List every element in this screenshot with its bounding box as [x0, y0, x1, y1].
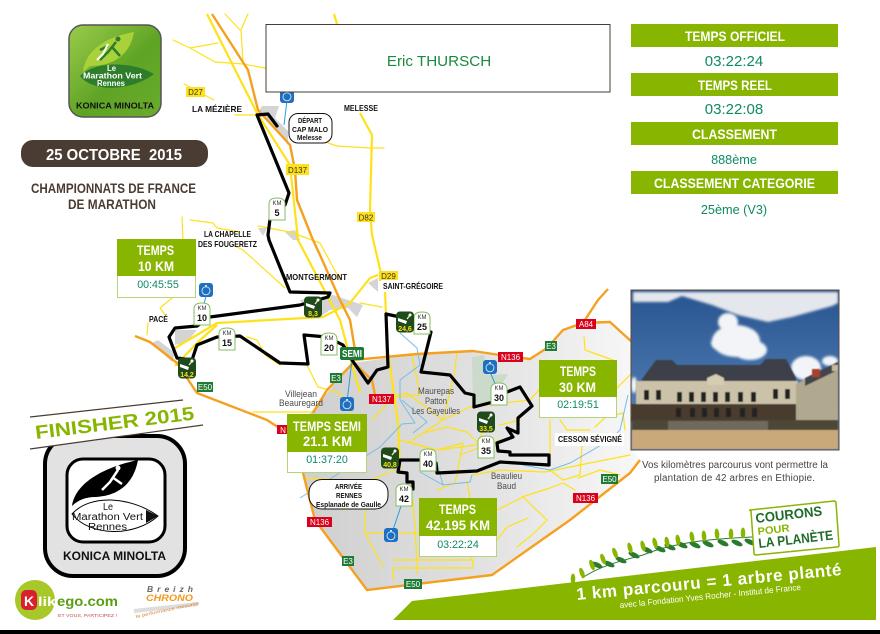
- A84: [576, 319, 596, 329]
- temps reel heading: [631, 73, 838, 96]
- callout: arrivée: RENNES: [336, 493, 362, 500]
- KM 42: 42: [399, 494, 409, 504]
- classement categorie heading: [631, 171, 838, 194]
- split box: temps 42.195 km: [419, 498, 497, 556]
- Les Gayeulles: Les Gayeulles: [412, 406, 460, 417]
- main yellow roads: [175, 14, 400, 470]
- logo: breizh chrono: Breizh: [147, 584, 193, 594]
- des Fougeretz: DES FOUGERETZ: [198, 239, 257, 249]
- KM 40: 40: [423, 459, 433, 469]
- temps officiel value: 03:22:24: [705, 53, 763, 70]
- camera 14.2: 14,2: [180, 372, 194, 379]
- KM 40: KM: [424, 452, 433, 458]
- D29: [379, 271, 398, 281]
- leaf garland: [571, 528, 756, 584]
- D82: [357, 212, 375, 222]
- split box: temps 42.195 km: 03:22:24: [437, 539, 479, 551]
- logo: klikego: ET VOUS, PARTICIPEZ !: [58, 613, 117, 618]
- La Mézière: LA MÉZIÈRE: [192, 104, 242, 114]
- kilometre markers: [194, 198, 507, 506]
- camera 14.2: [178, 358, 196, 379]
- logo: breizh chrono: la performance mesurée: [135, 600, 200, 619]
- camera 24.6: [396, 312, 414, 333]
- N136 south-west: N136: [310, 518, 330, 527]
- SEMI marker: SEMI: [342, 349, 362, 360]
- KM 25: 25: [417, 322, 427, 332]
- badge: courons pour la planète: COURONS: [755, 503, 823, 526]
- temps reel heading: TEMPS REEL: [698, 77, 772, 93]
- callout: arrivée: Esplanade de Gaulle: [316, 502, 381, 509]
- split box: temps 10 km: 10 KM: [138, 258, 174, 274]
- KM 35: [478, 436, 494, 458]
- Maurepas: Maurepas: [418, 386, 454, 397]
- Saint-Grégoire: SAINT-GRÉGOIRE: [383, 281, 443, 291]
- classement value: 888ème: [711, 153, 757, 167]
- D137: D137: [288, 166, 308, 175]
- callout: départ: CAP MALO: [292, 127, 329, 134]
- N136 west: N: [280, 426, 286, 435]
- subtitle: championnats: [31, 180, 196, 212]
- photo caption: [642, 460, 829, 484]
- logo: Marathon Vert: KONICA MINOLTA: [76, 100, 154, 110]
- camera markers: [178, 296, 495, 469]
- split box: temps semi: TEMPS SEMI: [293, 418, 361, 434]
- KM 10: 10: [197, 313, 207, 323]
- E3 north: E3: [331, 374, 341, 383]
- date pill: [21, 140, 208, 167]
- La Chapelle: LA CHAPELLE: [204, 229, 251, 239]
- KM 10: KM: [198, 306, 207, 312]
- finisher badge: Marathon Vert: [72, 512, 143, 523]
- KM 15: KM: [222, 331, 232, 337]
- finisher banner: FINISHER 2015: [34, 404, 196, 444]
- E50 east: E50: [602, 475, 617, 484]
- logo: Marathon Vert: Rennes: [97, 79, 126, 88]
- KM 42: [396, 484, 412, 506]
- chrono icons: [199, 89, 497, 542]
- photo caption: Vos kilomètres parcourus vont permettre la: [642, 460, 829, 471]
- split box: temps 30 km: 02:19:51: [557, 399, 599, 411]
- green banner: [393, 547, 876, 620]
- KM 25: KM: [418, 315, 427, 321]
- Villejean: Villejean: [285, 389, 317, 400]
- logo: breizh chrono: [134, 584, 200, 619]
- Cesson Sévigné backing: [555, 433, 624, 446]
- split box: temps 30 km: TEMPS: [560, 363, 596, 379]
- KM 20: 20: [324, 343, 334, 353]
- chrono connector lines: [204, 100, 497, 530]
- KM 5: KM: [272, 201, 282, 207]
- Patton: Patton: [425, 396, 447, 407]
- photo caption: plantation de 42 arbres en Ethiopie.: [654, 473, 815, 484]
- split box: temps 30 km: [539, 360, 617, 418]
- classement heading: CLASSEMENT: [692, 126, 777, 142]
- chrono: 10 km: [199, 283, 213, 297]
- runner name box: Eric THURSCH: [387, 53, 491, 70]
- finisher banner: [30, 400, 203, 449]
- city grey area: [303, 322, 640, 590]
- badge: courons pour la planète: POUR: [757, 522, 791, 538]
- bottom black strip: [0, 630, 880, 634]
- chrono: 30 km: [483, 360, 497, 374]
- callout: arrivée: ARRIVÉE: [335, 482, 362, 491]
- KM 30: 30: [494, 393, 504, 403]
- D82: D82: [359, 214, 374, 222]
- KM 20: KM: [324, 336, 334, 342]
- split box: temps 30 km: 30 KM: [559, 379, 596, 395]
- camera 33.5: 33,5: [479, 426, 493, 433]
- camera 8.3: 8,3: [308, 311, 318, 318]
- KM 15: [219, 328, 235, 350]
- KM 42: KM: [400, 487, 409, 493]
- split box: temps 10 km: TEMPS: [137, 242, 174, 258]
- N137: [369, 394, 394, 404]
- logo: klikego: ego.com: [57, 593, 118, 609]
- Baud: Baud: [497, 481, 516, 492]
- KM 25: [414, 312, 430, 334]
- D27: D27: [188, 88, 203, 97]
- E3 south: E3: [343, 557, 353, 566]
- logo: breizh chrono: CHRONO: [146, 593, 193, 603]
- route: race course: [169, 114, 549, 489]
- callout: départ: [289, 114, 332, 143]
- logo: klikego: K: [24, 593, 34, 609]
- D137: [286, 164, 309, 175]
- N137: N137: [372, 395, 392, 404]
- split box: temps semi: 01:37:20: [306, 454, 348, 466]
- chrono: départ: [280, 89, 294, 103]
- Beauregard: Beauregard: [279, 398, 323, 409]
- chrono: semi: [340, 397, 354, 411]
- N136 west: [277, 425, 289, 435]
- Melesse: MELESSE: [344, 103, 378, 113]
- subtitle: championnats: DE MARATHON: [68, 196, 156, 212]
- split box: temps 10 km: 00:45:55: [137, 279, 179, 291]
- Cesson Sévigné: CESSON SÉVIGNÉ: [558, 434, 622, 444]
- callout: départ: Melesse: [297, 135, 322, 142]
- road labels: [186, 87, 618, 589]
- photo: Parlement de Bretagne: [631, 290, 839, 450]
- results panel: [631, 24, 838, 217]
- split box: temps 42.195 km: 42.195 KM: [426, 517, 490, 533]
- runner name box: [266, 24, 610, 92]
- N136 south-east: N136: [576, 494, 596, 503]
- finisher badge: KONICA MINOLTA: [63, 549, 166, 563]
- D27: [186, 87, 205, 97]
- chrono: arrivée: [384, 528, 398, 542]
- finisher badge: Rennes: [88, 522, 127, 533]
- temps officiel heading: [631, 24, 838, 47]
- classement categorie heading: CLASSEMENT CATEGORIE: [654, 175, 815, 191]
- temps reel value: 03:22:08: [705, 101, 763, 118]
- logo: klikego: lik: [38, 594, 57, 609]
- split box: temps 10 km: [117, 239, 196, 298]
- finisher badge: [45, 436, 185, 576]
- camera 40.8: 40,8: [383, 462, 397, 469]
- place names: [149, 103, 624, 492]
- classement categorie value: 25ème (V3): [701, 203, 767, 217]
- green banner: 1 km parcouru = 1 arbre planté: [576, 560, 842, 604]
- callout: arrivée: [309, 480, 388, 509]
- KM 5: [269, 198, 285, 220]
- subtitle: championnats: CHAMPIONNATS DE FRANCE: [31, 180, 196, 196]
- split box: temps semi: 21.1 KM: [303, 433, 352, 449]
- badge: courons pour la planète: [750, 501, 839, 555]
- camera 33.5: [477, 412, 495, 433]
- camera 40.8: [381, 448, 399, 469]
- A84: A84: [579, 320, 594, 329]
- KM 10: [194, 303, 210, 325]
- E50 west: E50: [198, 383, 213, 392]
- KM 35: 35: [481, 446, 491, 456]
- split box: temps semi: [287, 414, 367, 472]
- logo: Marathon Vert: Marathon Vert: [83, 72, 142, 80]
- map: Rennes road network: [135, 14, 640, 590]
- thin yellow roads: [147, 14, 632, 580]
- date pill: 25 OCTOBRE 2015: [46, 147, 182, 164]
- logo: Marathon Vert: Le: [107, 64, 117, 73]
- E3 east: E3: [546, 342, 556, 351]
- commune grey patches: [152, 106, 378, 362]
- camera 8.3: [304, 296, 322, 318]
- classement heading: [631, 122, 838, 145]
- KM 30: KM: [494, 386, 504, 392]
- rivers: [300, 333, 628, 498]
- park: [472, 355, 508, 407]
- KM 40: [420, 449, 436, 471]
- N136 south-west: [307, 517, 332, 527]
- callout: départ: DÉPART: [298, 116, 323, 125]
- Montgermont: MONTGERMONT: [286, 272, 348, 282]
- D29: D29: [381, 272, 396, 281]
- badge: courons pour la planète: LA PLANÈTE: [758, 528, 834, 551]
- green banner: avec la Fondation Yves Rocher - Institut de France: [619, 582, 802, 610]
- temps officiel heading: TEMPS OFFICIEL: [685, 28, 785, 44]
- split box: temps 42.195 km: TEMPS: [439, 501, 476, 517]
- N136 north: N136: [501, 353, 521, 362]
- N136 north: [498, 352, 523, 362]
- KM 30: [491, 383, 507, 405]
- N136 south-east: [573, 493, 598, 503]
- logo: Marathon Vert: [69, 25, 161, 117]
- KM 35: KM: [482, 439, 491, 445]
- KM 5: 5: [274, 208, 280, 218]
- camera 24.6: 24,6: [398, 326, 412, 333]
- KM 20: [321, 333, 337, 355]
- orange motorways: [135, 14, 640, 590]
- KM 15: 15: [222, 338, 232, 348]
- Beaulieu: Beaulieu: [491, 471, 522, 482]
- finisher badge: Le: [103, 502, 113, 513]
- logo: klikego: [15, 580, 118, 620]
- Saint-Grégoire backing: [381, 280, 445, 292]
- E50 south: E50: [406, 580, 421, 589]
- Pacé: PACÉ: [149, 314, 168, 324]
